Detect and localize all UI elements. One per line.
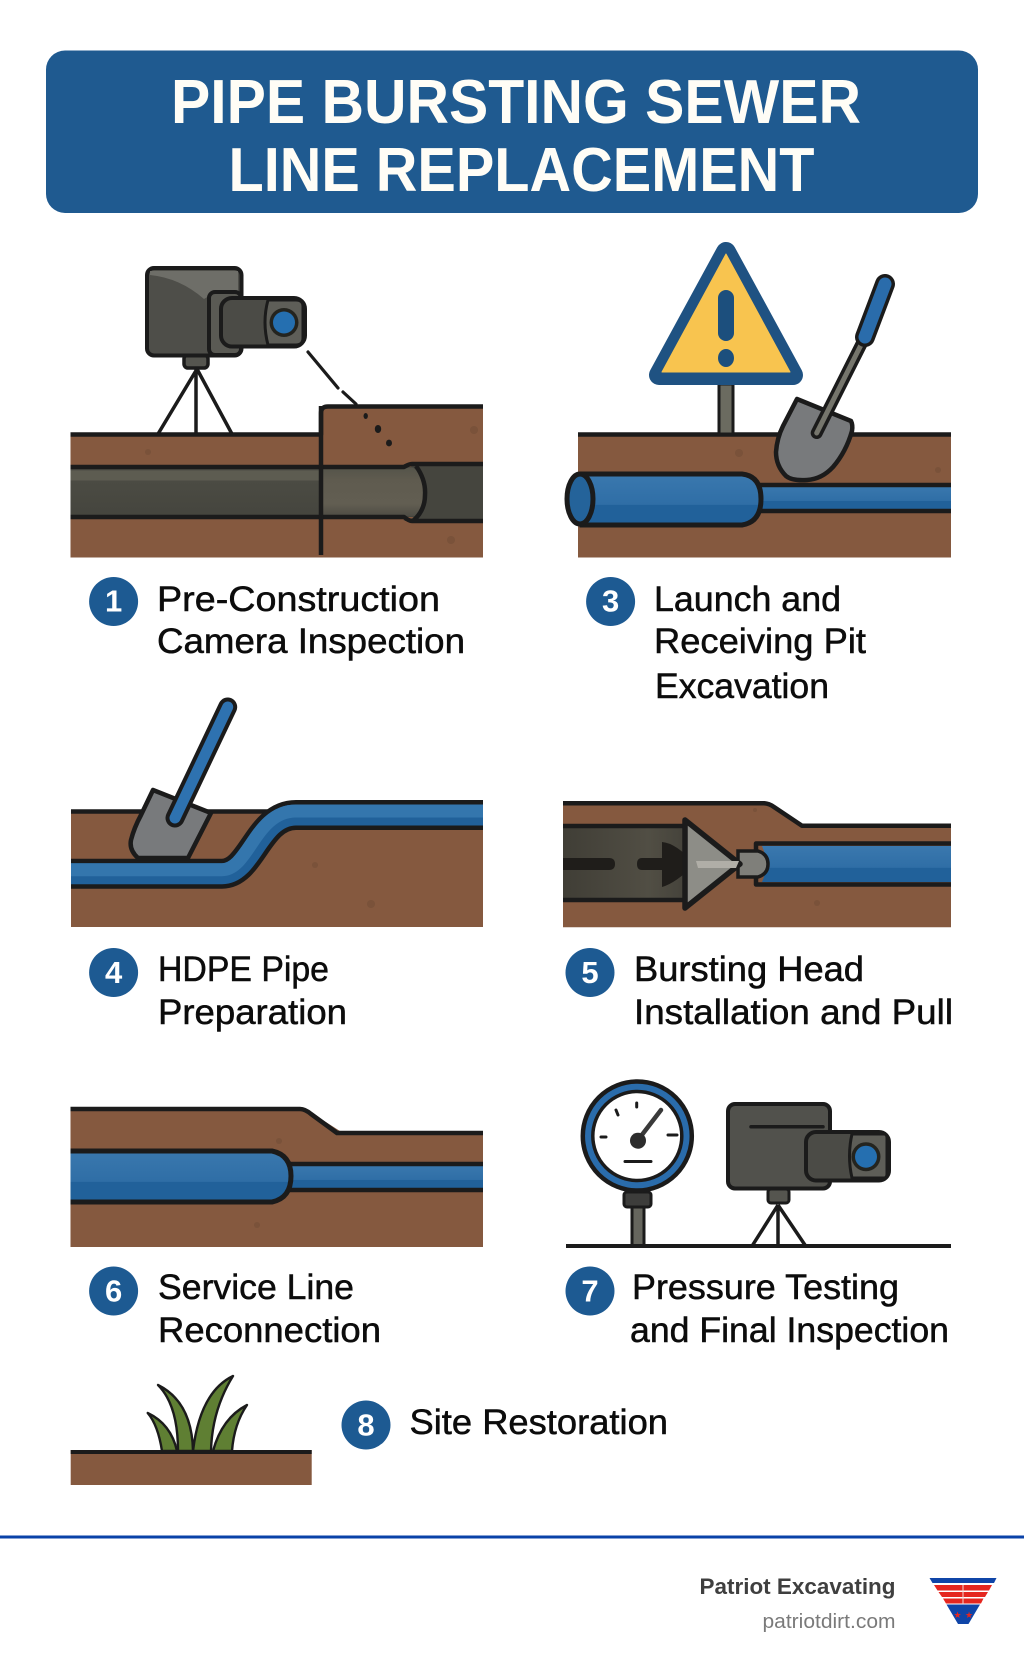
- panel: step 1 camera inspection: [70, 268, 483, 558]
- panel: step 6 service line reconnection: [70, 1108, 483, 1247]
- step 7 label: 7: [581, 1274, 599, 1308]
- footer brand text: Patriot Excavating: [700, 1574, 896, 1599]
- blue pipe: [70, 1151, 483, 1202]
- logo: [930, 1578, 996, 1624]
- pull connector: [738, 851, 768, 877]
- camera sight line: [308, 352, 392, 446]
- soil: [71, 1450, 312, 1485]
- panel: step 4 HDPE pipe preparation: [71, 707, 483, 927]
- title banner: [46, 50, 978, 213]
- soil: [578, 434, 951, 558]
- old pipe section: [563, 826, 685, 900]
- soil: [71, 805, 483, 927]
- panel: step 3 launch pit: [567, 252, 951, 558]
- step 6 label: Reconnection: [158, 1311, 381, 1350]
- icon: warning sign: [659, 252, 793, 434]
- title banner: LINE REPLACEMENT: [228, 136, 815, 205]
- step 6 label: Service Line: [158, 1268, 354, 1307]
- step 5 label: 5: [581, 955, 599, 990]
- step 3 label: 3: [602, 584, 619, 618]
- step 8 label: [342, 1400, 668, 1450]
- step 1 label: [89, 577, 465, 661]
- HDPE pipe: [71, 811, 483, 874]
- icon: grass: [148, 1376, 247, 1451]
- panel: step 5 bursting head: [563, 801, 951, 927]
- step 3 label: [586, 577, 866, 706]
- new blue pipe: [756, 844, 951, 884]
- panel: step 8 site restoration: [71, 1376, 312, 1485]
- step 4 label: 4: [105, 955, 123, 990]
- bursting head cone: [685, 820, 740, 908]
- step 7 label: and Final Inspection: [630, 1311, 949, 1350]
- icon: pressure gauge: [583, 1082, 692, 1246]
- soil with raised block: [70, 406, 483, 558]
- step 1 label: 1: [105, 584, 122, 618]
- step 1 label: Camera Inspection: [157, 622, 465, 661]
- step 6 label: [89, 1266, 381, 1350]
- icon: camera on tripod: [728, 1104, 889, 1245]
- soil: [563, 801, 951, 927]
- step 6 label: 6: [105, 1274, 122, 1308]
- icon: shovel: [131, 707, 228, 858]
- soil: [70, 1108, 483, 1247]
- logo: ★: [965, 1610, 973, 1620]
- title banner: PIPE BURSTING SEWER: [171, 68, 861, 137]
- step 8 label: Site Restoration: [410, 1403, 668, 1442]
- step 1 label: Pre-Construction: [157, 580, 440, 619]
- step 4 label: HDPE Pipe: [158, 950, 329, 989]
- old pipe: [70, 406, 483, 555]
- footer brand text: patriotdirt.com: [762, 1611, 896, 1633]
- step 3 label: Launch and: [654, 580, 841, 619]
- logo: ★: [953, 1610, 962, 1620]
- new pipe with expanded section: [567, 474, 951, 525]
- footer brand text: [700, 1574, 896, 1633]
- step 7 label: [566, 1266, 949, 1350]
- footer divider: [0, 1536, 1024, 1538]
- panel: step 7 pressure test and final inspection: [566, 1082, 951, 1248]
- step 5 label: Bursting Head: [634, 950, 864, 989]
- ground line: [71, 1450, 312, 1454]
- step 4 label: Preparation: [158, 993, 347, 1032]
- step 3 label: Receiving Pit: [654, 622, 866, 661]
- step 5 label: [566, 948, 953, 1032]
- step 7 label: Pressure Testing: [632, 1268, 899, 1307]
- step 8 label: 8: [357, 1408, 375, 1442]
- step 3 label: Excavation: [655, 667, 829, 706]
- step 5 label: Installation and Pull: [634, 993, 953, 1032]
- step 4 label: [89, 948, 347, 1032]
- icon: inspection camera on tripod: [147, 268, 305, 434]
- ground line: [566, 1244, 951, 1248]
- direction arrow: [563, 842, 695, 887]
- icon: shovel: [776, 284, 885, 480]
